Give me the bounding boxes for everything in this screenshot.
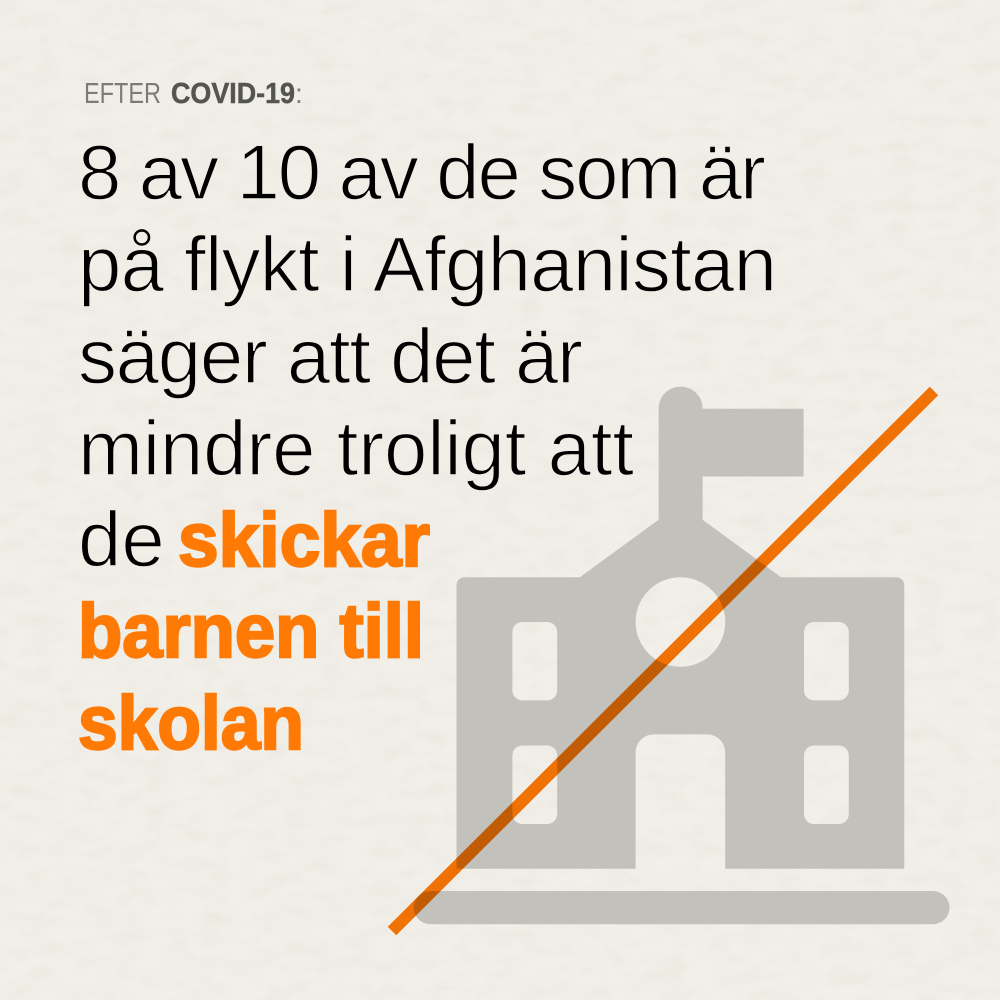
highlighted statement: [78, 498, 430, 766]
eyebrow colon: :: [295, 78, 303, 109]
eyebrow heading bold part: COVID-19: [171, 78, 295, 110]
icon: school building: [456, 387, 904, 869]
icon: school base: [414, 891, 950, 924]
highlighted statement: skickar: [178, 498, 430, 583]
main statement: 8 av 10 av de som är: [78, 128, 766, 216]
main statement: [78, 128, 777, 766]
main statement: på flykt i Afghanistan: [78, 220, 777, 308]
main statement: säger att det är: [78, 312, 583, 400]
main statement: mindre troligt att: [78, 404, 634, 492]
strike-through line: [392, 391, 934, 931]
eyebrow heading: EFTER: [84, 78, 161, 110]
highlighted statement: skolan: [78, 681, 304, 766]
main statement: de: [78, 495, 165, 583]
highlighted statement: barnen till: [78, 589, 424, 674]
